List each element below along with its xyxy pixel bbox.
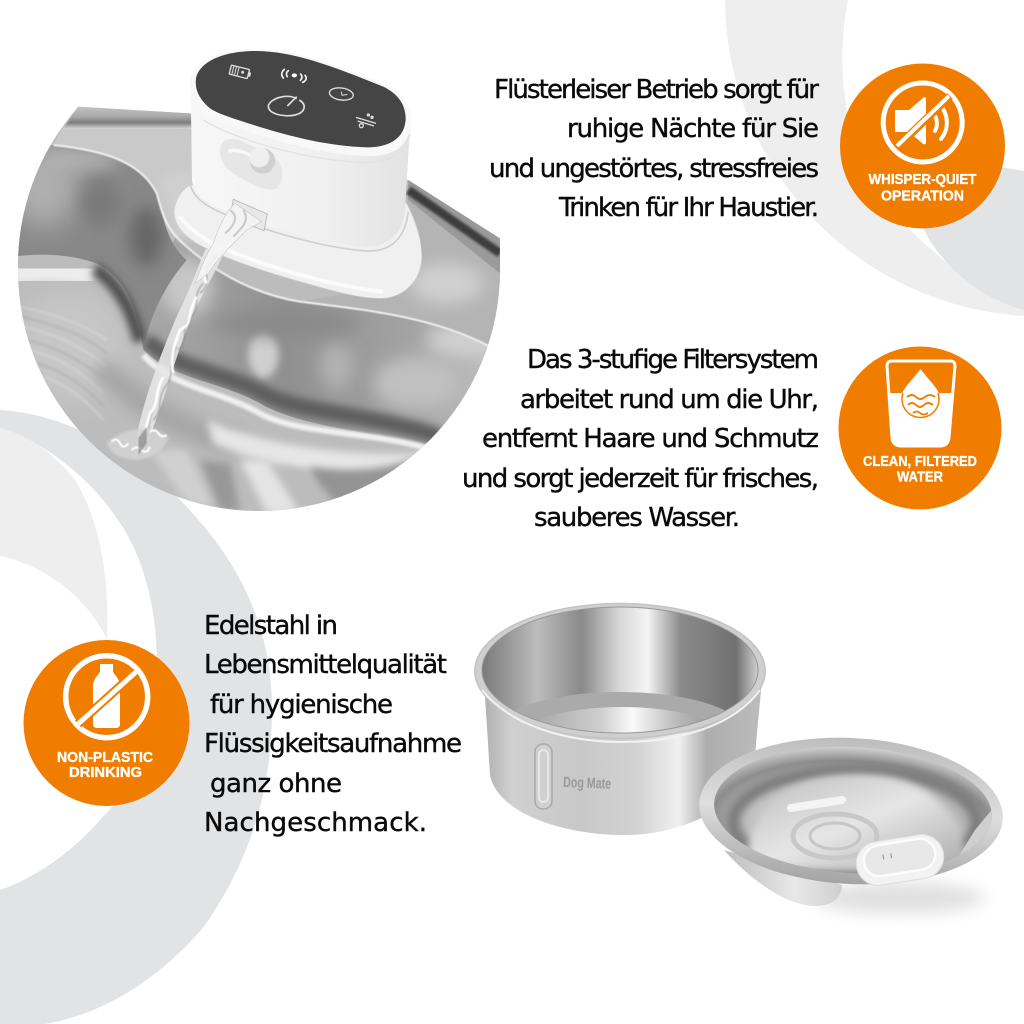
background: top right grey crescent — [725, 0, 1024, 316]
water stream — [107, 207, 240, 460]
text block: stainless steel: für hygienische — [210, 690, 393, 720]
text block: filter system: entfernt Haare und Schmutz — [482, 424, 819, 454]
badge: clean, filtered water: CLEAN, FILTERED — [863, 454, 977, 470]
badge: whisper-quiet operation: WHISPER-QUIET — [868, 172, 977, 188]
panel icons — [229, 65, 376, 128]
text block: stainless steel: Edelstahl in — [204, 611, 338, 641]
icon: glass with water drop — [887, 361, 955, 446]
collar — [174, 185, 422, 298]
outer rim — [63, 107, 192, 129]
tray underside — [724, 850, 842, 906]
highlight at water line — [143, 355, 428, 448]
badge: non-plastic drinking — [24, 640, 190, 806]
text block: quiet operation: ruhige Nächte für Sie — [567, 114, 819, 144]
sensor window — [220, 139, 283, 190]
badge: clean, filtered water — [838, 346, 1002, 510]
text block: stainless steel: Lebensmittelqualität — [204, 650, 447, 680]
text block: stainless steel — [204, 611, 462, 838]
inner wall left — [18, 145, 186, 350]
spout — [230, 199, 267, 231]
text block: stainless steel: ganz ohne — [210, 769, 342, 799]
photo: stainless steel bowl — [474, 603, 766, 835]
icon: muted speaker — [883, 83, 962, 162]
badge: whisper-quiet operation: OPERATION — [881, 188, 964, 204]
level window — [535, 744, 552, 809]
badge: clean, filtered water: WATER — [897, 470, 943, 486]
text block: filter system — [462, 345, 819, 533]
embossed ring — [793, 814, 877, 858]
body — [191, 90, 411, 247]
text block: quiet operation — [489, 75, 819, 223]
photo: water fountain spout over stainless bowl — [18, 51, 500, 511]
floor of water — [13, 290, 430, 513]
text block: filter system: sauberes Wasser. — [534, 503, 740, 533]
device: pump unit with touch panel — [174, 49, 422, 298]
text block: stainless steel: Nachgeschmack. — [204, 808, 427, 838]
photo: stainless steel tray with white seat — [695, 730, 1007, 914]
bright curved band — [10, 271, 93, 278]
text block: quiet operation: und ungestörtes, stressfreies — [489, 154, 819, 184]
text block: quiet operation: Flüsterleiser Betrieb sorgt für — [494, 75, 819, 105]
main stainless wall — [144, 238, 488, 446]
badge: non-plastic drinking: DRINKING — [69, 765, 142, 781]
white bar — [791, 800, 842, 808]
icon: crossed plastic bottle — [66, 656, 148, 738]
badge: non-plastic drinking: NON-PLASTIC — [57, 750, 153, 766]
background: bottom left grey crescent — [0, 410, 272, 1024]
dark touch panel — [196, 51, 406, 147]
logo: Dog Mate — [563, 774, 611, 793]
text block: filter system: und sorgt jederzeit für frisches, — [462, 464, 819, 494]
top rim — [190, 49, 411, 156]
text block: stainless steel: Flüssigkeitsaufnahme — [204, 729, 462, 759]
badge: whisper-quiet operation — [840, 64, 1005, 228]
text block: quiet operation: Trinken für Ihr Haustier. — [558, 193, 819, 223]
white oval seat — [853, 831, 947, 889]
text block: filter system: arbeitet rund um die Uhr, — [520, 385, 819, 415]
text block: filter system: Das 3-stufige Filtersystem — [527, 345, 819, 375]
ledge — [53, 127, 200, 238]
